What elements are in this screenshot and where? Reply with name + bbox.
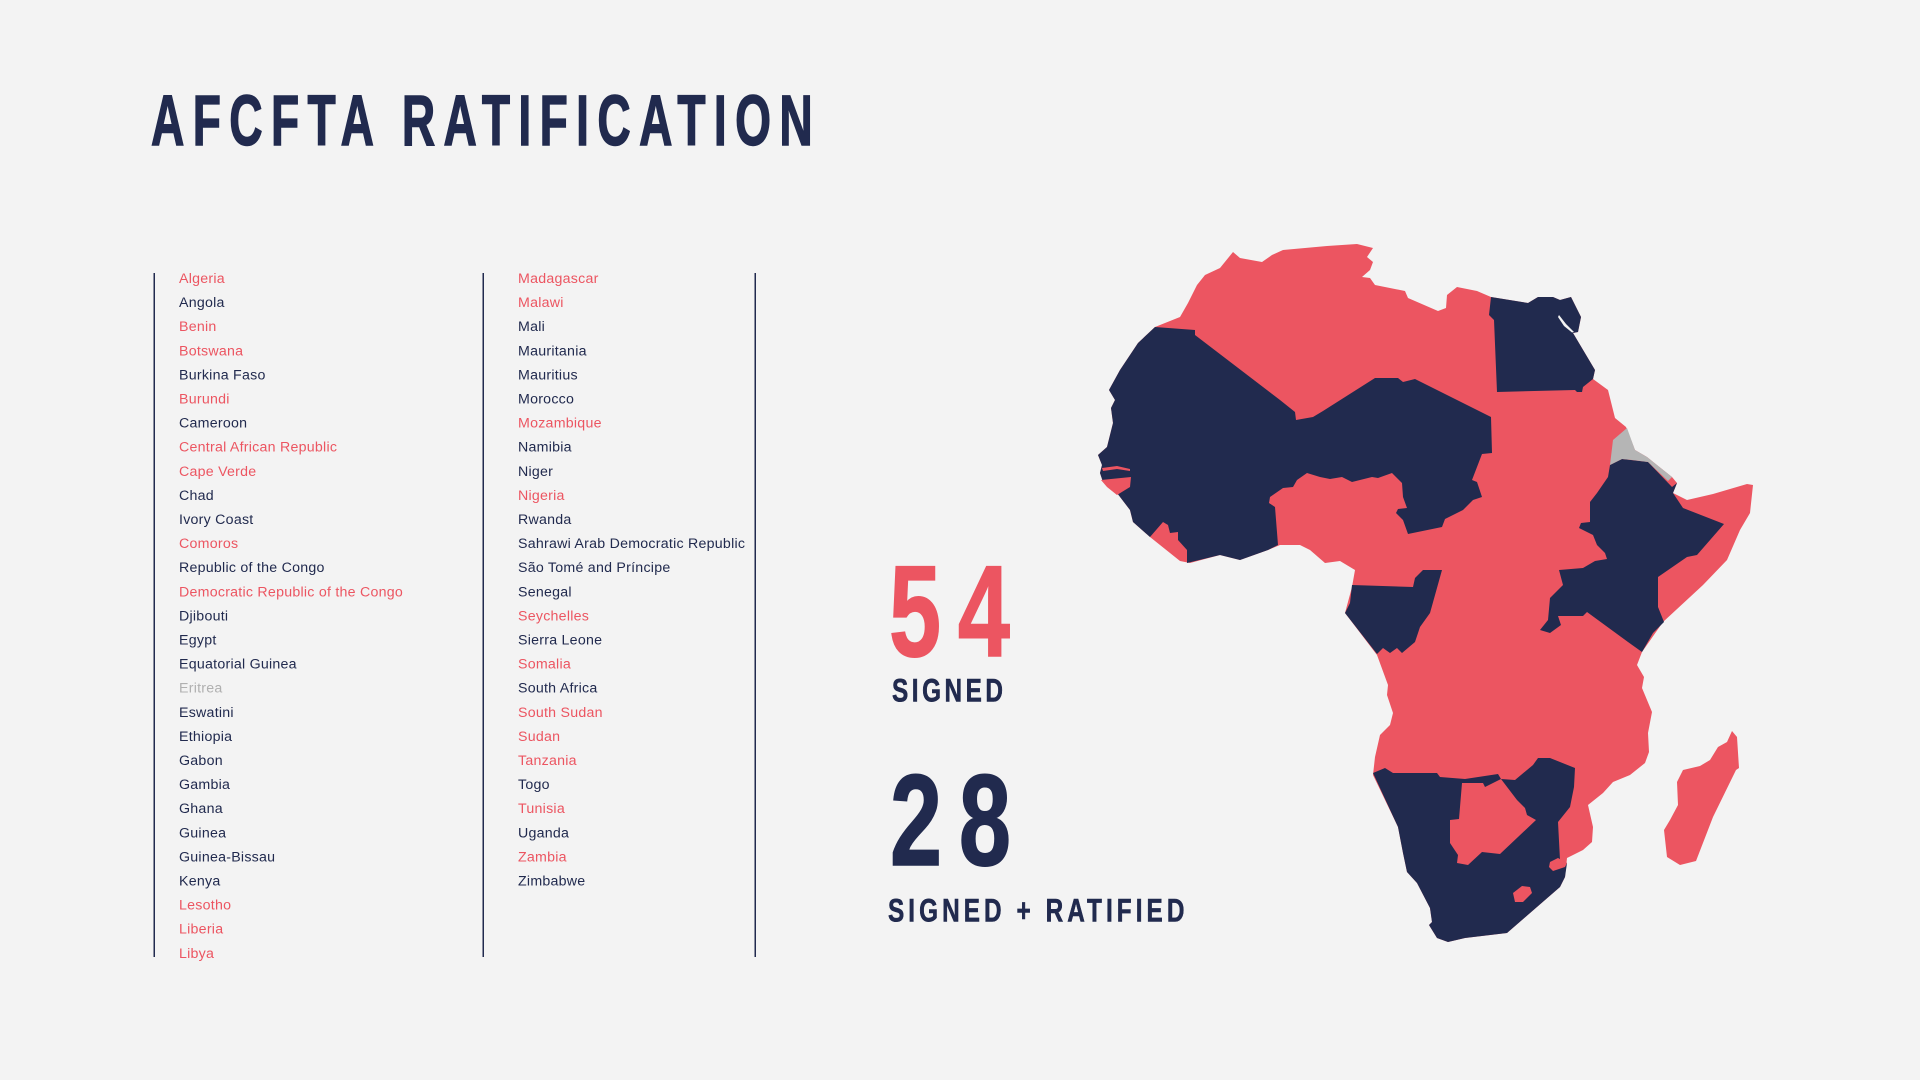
country list: column 2 xyxy=(518,271,745,890)
country list: column 2: Mauritius xyxy=(518,367,578,383)
map: Egypt xyxy=(1489,297,1595,392)
map: West Africa, Niger and Chad ratified block xyxy=(1098,327,1492,563)
country list: column 1: Guinea-Bissau xyxy=(179,849,275,865)
country list: column 1: Algeria xyxy=(179,271,225,287)
country list: column 2: Madagascar xyxy=(518,271,599,287)
country list: column 2: Morocco xyxy=(518,392,574,408)
map: Southern Africa ratified block xyxy=(1373,758,1575,942)
map: Gabon and Equatorial Guinea xyxy=(1345,570,1442,654)
map: Madagascar xyxy=(1664,731,1739,865)
map: Gulf of Suez xyxy=(1558,315,1574,332)
map of Africa xyxy=(1098,244,1753,942)
country list: column 2: São Tomé and Príncipe xyxy=(518,560,670,576)
stat: 54 signed: 54 xyxy=(889,539,1010,685)
country list: column 2: Malawi xyxy=(518,295,564,311)
country list: column 1: Comoros xyxy=(179,536,238,552)
country list: column 2: Mali xyxy=(518,319,545,335)
stat: 28 signed and ratified: 28 xyxy=(890,748,1011,894)
country list: column 1: Benin xyxy=(179,319,217,335)
country list: column 1: Botswana xyxy=(179,343,243,359)
country list: column 1: Djibouti xyxy=(179,608,228,624)
country list: column 1: Cape Verde xyxy=(179,464,256,480)
country list: column 1: Equatorial Guinea xyxy=(179,657,297,673)
country list: column 2: Sahrawi Arab Democratic Republic xyxy=(518,536,745,552)
country list: column 1: Liberia xyxy=(179,922,223,938)
country list: column 2: South Sudan xyxy=(518,705,603,721)
country list: column 2: Senegal xyxy=(518,584,572,600)
country list: column 2: Somalia xyxy=(518,657,571,673)
title: AFCFTA RATIFICATION xyxy=(151,81,813,160)
country list: column 2: Zimbabwe xyxy=(518,874,585,890)
country list: column 2: Namibia xyxy=(518,440,572,456)
country list: column 1: Burkina Faso xyxy=(179,367,266,383)
country list: column 1: Ivory Coast xyxy=(179,512,254,528)
country list: column 1: Eswatini xyxy=(179,705,234,721)
map: Eritrea xyxy=(1610,428,1672,481)
country list: column 1: Guinea xyxy=(179,825,226,841)
country list: column 1: Ghana xyxy=(179,801,223,817)
country list: column 1: Central African Republic xyxy=(179,440,337,456)
country list: column 1 xyxy=(179,271,403,962)
country list: column 2: Seychelles xyxy=(518,608,589,624)
stat: 28 signed and ratified: SIGNED + RATIFIED xyxy=(888,893,1184,929)
country list: column 1: Egypt xyxy=(179,632,217,648)
country list: column 1: Chad xyxy=(179,488,214,504)
map: Guinea-Bissau xyxy=(1101,477,1131,495)
country list: column 1: Angola xyxy=(179,295,225,311)
country list: column 1: Gambia xyxy=(179,777,230,793)
country list: column 1: Gabon xyxy=(179,753,223,769)
country list: column 1: Ethiopia xyxy=(179,729,232,745)
country list: column 2: Tunisia xyxy=(518,801,565,817)
map: Lesotho xyxy=(1513,886,1532,902)
country list: column 2: Niger xyxy=(518,464,553,480)
country list: column 2: Mozambique xyxy=(518,416,602,432)
country list: column 2: Sudan xyxy=(518,729,560,745)
country list: column 1: Eritrea xyxy=(179,681,223,697)
country list: column 1: Democratic Republic of the Congo xyxy=(179,584,403,600)
map: Botswana xyxy=(1450,779,1536,865)
country list: column 2: Mauritania xyxy=(518,343,587,359)
country list: column 2: Rwanda xyxy=(518,512,572,528)
stat: 28 signed and ratified xyxy=(888,748,1184,929)
stat: 54 signed: SIGNED xyxy=(892,673,1003,709)
country list: column 1: Cameroon xyxy=(179,416,247,432)
map: signed countries (continent base) xyxy=(1098,244,1753,942)
country list: column 2: Togo xyxy=(518,777,550,793)
country list: column 1: Libya xyxy=(179,946,214,962)
map: Gambia gap xyxy=(1102,466,1130,471)
country list: column 2: Uganda xyxy=(518,825,569,841)
country list: column 1: Lesotho xyxy=(179,898,231,914)
country list: column 2: South Africa xyxy=(518,681,598,697)
country list: column 2: Zambia xyxy=(518,849,567,865)
country list: column 2: Nigeria xyxy=(518,488,565,504)
country list: column 1: Burundi xyxy=(179,392,230,408)
country list: column 2: Tanzania xyxy=(518,753,577,769)
map: Ethiopia, Djibouti, Kenya, Uganda, Rwanda xyxy=(1540,459,1724,652)
country list: column 2: Sierra Leone xyxy=(518,632,602,648)
country list: column 1: Kenya xyxy=(179,874,220,890)
country list: column 1: Republic of the Congo xyxy=(179,560,325,576)
map: Maputo notch xyxy=(1549,858,1567,871)
